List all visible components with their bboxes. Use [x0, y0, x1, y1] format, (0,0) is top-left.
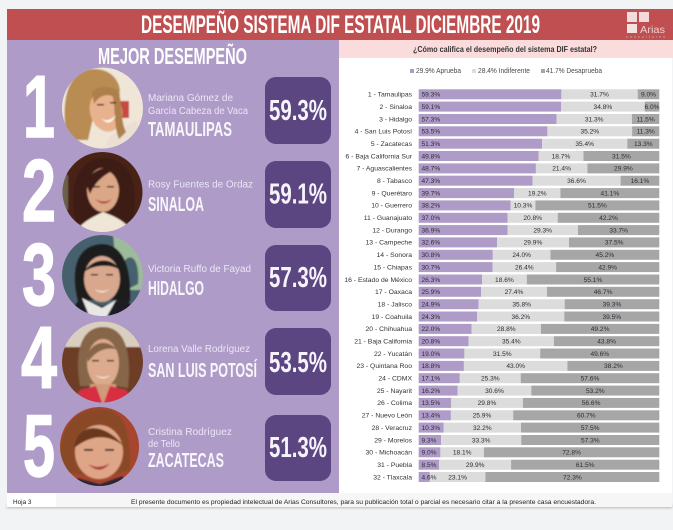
copyright notice: El presente documento es propiedad intelectual de Arias Consultores, para su publicación total o parcial es necesario citar a la presente casa encuestadora. — [131, 499, 596, 506]
name and state — [148, 427, 232, 472]
row 6 — [346, 151, 659, 161]
row 21: 21 - Baja California — [354, 339, 412, 346]
row 9: 41.1% — [601, 190, 619, 197]
row 14: 30.8% — [422, 252, 440, 259]
row 17: 46.7% — [594, 289, 613, 296]
row 23: 18.8% — [422, 363, 440, 370]
row 3: 31.3% — [585, 116, 604, 123]
name and state: Rosy Fuentes de Ordaz — [148, 180, 253, 190]
row 12: 12 - Durango — [372, 227, 412, 234]
row 17 — [375, 287, 659, 297]
row 29: 57.3% — [581, 437, 600, 444]
row 27: 27 - Nuevo León — [362, 413, 412, 420]
row 20: 49.2% — [591, 326, 610, 333]
row 21: 35.4% — [502, 339, 521, 346]
portrait 1 — [62, 68, 143, 148]
row 19 — [372, 312, 659, 322]
row 29: 33.3% — [472, 437, 491, 444]
row 2: 6.0% — [644, 104, 660, 111]
score box: 59.1% — [269, 178, 327, 210]
portrait 3 — [60, 233, 145, 318]
row 26: 13.5% — [422, 400, 440, 407]
row 13 — [366, 237, 659, 247]
logo: Arias Consultores: Arias — [640, 24, 665, 36]
row 9: 9 - Querétaro — [372, 190, 412, 197]
row 13: 37.5% — [605, 240, 624, 247]
row 5: 13.3% — [634, 141, 653, 148]
name and state: SINALOA — [148, 194, 204, 216]
score box: 53.5% — [269, 347, 327, 379]
row 10: 10.3% — [514, 203, 532, 210]
legend: 29.9% Aprueba — [416, 66, 462, 75]
row 24: 25.3% — [481, 376, 500, 383]
row 18: 39.3% — [603, 302, 621, 309]
row 9: 39.7% — [422, 190, 440, 197]
row 16: 55.1% — [584, 277, 602, 284]
row 1 — [368, 89, 659, 99]
name and state: Cristina Rodríguez — [148, 427, 232, 438]
row 8: 8 - Tabasco — [377, 178, 412, 185]
row 19: 39.5% — [602, 314, 621, 321]
row 5 — [371, 139, 659, 149]
row 24: 57.6% — [581, 376, 599, 383]
rank number 4: 4 — [21, 308, 57, 407]
row 3 — [379, 114, 659, 124]
row 4: 35.2% — [580, 129, 599, 136]
row 13: 32.6% — [422, 240, 440, 247]
score box: 59.3% — [269, 95, 327, 127]
row 30: 30 - Michoacán — [366, 450, 412, 457]
row 24 — [378, 373, 659, 383]
score box — [265, 77, 331, 144]
row 6: 18.7% — [552, 153, 570, 160]
heading: mejor desempeño: MEJOR DESEMPEÑO — [98, 42, 247, 69]
row 26: 29.8% — [478, 400, 496, 407]
name and state: ZACATECAS — [148, 450, 224, 472]
question heading — [339, 40, 673, 58]
row 21: 20.8% — [422, 339, 440, 346]
row 27: 25.9% — [473, 413, 491, 420]
row 20 — [366, 324, 659, 334]
row 5: 51.3% — [422, 141, 440, 148]
row 18: 18 - Jalisco — [378, 302, 412, 309]
score box — [265, 328, 331, 395]
name and state — [148, 180, 253, 216]
row 1: 31.7% — [590, 92, 609, 99]
row 8: 36.6% — [567, 178, 586, 185]
question heading: ¿Cómo califica el desempeño del sistema DIF estatal? — [413, 45, 597, 54]
row 8: 16.1% — [631, 178, 649, 185]
row 32: 23.1% — [448, 474, 467, 481]
row 28 — [372, 423, 659, 433]
row 3: 11.5% — [636, 116, 655, 123]
row 15: 26.4% — [515, 264, 534, 271]
row 15 — [373, 262, 659, 272]
row 30 — [366, 447, 659, 457]
row 31: 8.5% — [422, 462, 437, 469]
row 20: 28.8% — [497, 326, 516, 333]
row 11: 42.2% — [599, 215, 618, 222]
name and state: SAN LUIS POTOSÍ — [148, 359, 257, 382]
row 16: 26.3% — [422, 277, 440, 284]
row 26 — [377, 398, 659, 408]
row 6: 49.8% — [422, 153, 440, 160]
name and state: TAMAULIPAS — [148, 119, 232, 141]
row 25: 30.6% — [485, 388, 504, 395]
row 3: 3 - Hidalgo — [379, 116, 412, 123]
row 32: 4.6% — [422, 474, 437, 481]
row 29 — [374, 435, 659, 445]
row 25: 25 - Nayarit — [377, 388, 412, 395]
legend — [410, 66, 603, 75]
row 6: 31.5% — [612, 153, 631, 160]
panel: mejor desempeño — [7, 40, 339, 495]
row 16 — [344, 274, 659, 284]
row 32: 72.3% — [563, 474, 582, 481]
row 9: 19.2% — [528, 190, 547, 197]
row 4: 4 - San Luis Potosí — [355, 129, 412, 136]
page label: Hoja 3 — [13, 499, 32, 506]
rank number 1: 1 — [23, 57, 55, 156]
row 10: 51.5% — [588, 203, 607, 210]
row 31 — [377, 460, 659, 470]
row 11: 37.0% — [422, 215, 440, 222]
row 17: 25.9% — [422, 289, 440, 296]
row 25: 16.2% — [422, 388, 440, 395]
row 2: 2 - Sinaloa — [380, 104, 412, 111]
row 11: 11 - Guanajuato — [364, 215, 412, 222]
row 24: 24 - CDMX — [378, 376, 412, 383]
row 19: 36.2% — [511, 314, 530, 321]
row 12: 33.7% — [609, 227, 628, 234]
row 17: 27.4% — [505, 289, 523, 296]
row 20: 22.0% — [422, 326, 440, 333]
row 25: 53.2% — [586, 388, 605, 395]
row 9 — [372, 188, 659, 198]
row 31: 29.9% — [466, 462, 485, 469]
portrait 5 — [60, 407, 139, 486]
name and state: Lorena Valle Rodríguez — [148, 344, 250, 355]
row 10: 38.2% — [422, 203, 440, 210]
row 23 — [356, 361, 659, 371]
row 24: 17.1% — [422, 376, 440, 383]
row 31: 31 - Puebla — [377, 462, 412, 469]
row 15: 30.7% — [422, 264, 440, 271]
rank 5: Zacatecas — [24, 407, 331, 486]
row 4 — [355, 126, 659, 136]
row 27: 13.4% — [422, 413, 440, 420]
name and state — [148, 344, 257, 382]
row 20: 20 - Chihuahua — [366, 326, 412, 333]
row 28: 28 - Veracruz — [372, 425, 413, 432]
row 2: 34.8% — [594, 104, 612, 111]
row 15: 42.9% — [598, 264, 617, 271]
row 1: 1 - Tamaulipas — [368, 92, 413, 99]
row 22: 49.6% — [590, 351, 609, 358]
row 30: 72.8% — [562, 450, 581, 457]
page label — [7, 493, 56, 507]
row 7: 29.9% — [614, 166, 633, 173]
row 27 — [362, 410, 659, 420]
row 14 — [376, 250, 659, 260]
row 27: 60.7% — [577, 413, 596, 420]
row 18 — [378, 299, 659, 309]
rank number 5: 5 — [23, 396, 55, 495]
name and state — [148, 93, 249, 141]
rank 2: Sinaloa — [24, 152, 331, 232]
logo: Arias Consultores: consultores — [626, 35, 665, 39]
row 19: 19 - Coahuila — [372, 314, 412, 321]
row 12: 29.3% — [533, 227, 552, 234]
row 3: 57.3% — [422, 116, 440, 123]
row 28: 32.2% — [473, 425, 492, 432]
row 8 — [377, 176, 659, 186]
row 25 — [377, 386, 659, 396]
rank 3: Hidalgo — [22, 235, 331, 316]
row 31: 61.5% — [576, 462, 595, 469]
rank 1: Tamaulipas — [26, 68, 331, 148]
row 23: 23 - Quintana Roo — [356, 363, 412, 370]
row 7: 48.7% — [422, 166, 440, 173]
rank number 3: 3 — [22, 225, 56, 324]
row 26: 56.6% — [582, 400, 601, 407]
name and state: de Tello — [148, 439, 181, 450]
row 2 — [380, 102, 660, 112]
footer — [7, 493, 672, 507]
row 21: 43.8% — [597, 339, 616, 346]
legend: 41.7% Desaprueba — [546, 66, 603, 75]
row 2: 59.1% — [422, 104, 440, 111]
row 5: 5 - Zacatecas — [371, 141, 413, 148]
row 14: 14 - Sonora — [376, 252, 412, 259]
row 11: 20.8% — [523, 215, 542, 222]
row 30: 9.0% — [422, 450, 437, 457]
row 13: 13 - Campeche — [366, 240, 412, 247]
score box: 51.3% — [269, 432, 327, 464]
row 32 — [373, 472, 659, 482]
row 26: 26 - Colima — [377, 400, 412, 407]
row 29: 29 - Morelos — [374, 437, 413, 444]
row 18: 24.9% — [422, 302, 440, 309]
row 28: 10.3% — [422, 425, 440, 432]
row 10 — [371, 200, 659, 210]
row 8: 47.3% — [422, 178, 440, 185]
row 6: 6 - Baja California Sur — [346, 153, 413, 160]
row 23: 38.2% — [604, 363, 623, 370]
row 12: 36.9% — [422, 227, 440, 234]
row 7 — [356, 163, 659, 173]
row 10: 10 - Guerrero — [371, 203, 412, 210]
row 7: 21.4% — [552, 166, 571, 173]
score box — [265, 245, 331, 311]
row 22: 19.0% — [422, 351, 440, 358]
rank 4: San Luis Potosí — [21, 322, 331, 402]
row 21 — [354, 336, 659, 346]
row 14: 45.2% — [596, 252, 614, 259]
row 29: 9.3% — [422, 437, 437, 444]
row 32: 32 - Tlaxcala — [373, 474, 412, 481]
score box — [265, 415, 331, 481]
rank number 2: 2 — [22, 141, 56, 240]
row 12 — [372, 225, 659, 235]
row 30: 18.1% — [453, 450, 472, 457]
score box — [265, 161, 331, 228]
portrait 4 — [60, 320, 145, 405]
row 7: 7 - Aguascalientes — [356, 166, 413, 173]
row 4: 53.5% — [422, 129, 440, 136]
name and state: Victoria Ruffo de Fayad — [148, 264, 251, 275]
row 15: 15 - Chiapas — [373, 264, 413, 271]
row 17: 17 - Oaxaca — [375, 289, 412, 296]
row 18: 35.8% — [512, 302, 531, 309]
panel: chart — [339, 40, 673, 493]
stacked bar chart — [344, 89, 660, 482]
portrait 2 — [62, 152, 142, 232]
score box: 57.3% — [269, 262, 327, 294]
row 22 — [374, 348, 659, 358]
row 1: 9.0% — [641, 92, 656, 99]
row 14: 24.0% — [512, 252, 531, 259]
row 22: 22 - Yucatán — [374, 351, 412, 358]
name and state — [148, 264, 251, 300]
row 19: 24.3% — [422, 314, 440, 321]
row 1: 59.3% — [422, 92, 440, 99]
row 5: 35.4% — [575, 141, 594, 148]
row 28: 57.5% — [581, 425, 600, 432]
name and state: HIDALGO — [148, 278, 204, 300]
row 22: 31.5% — [493, 351, 512, 358]
row 16: 16 - Estado de México — [344, 277, 412, 284]
row 23: 43.0% — [506, 363, 525, 370]
row 16: 18.6% — [495, 277, 514, 284]
row 11 — [364, 213, 659, 223]
logo: Arias Consultores — [626, 12, 665, 39]
name and state: García Cabeza de Vaca — [148, 106, 249, 117]
footer shadow — [7, 505, 672, 508]
row 4: 11.3% — [637, 129, 655, 136]
header banner — [7, 9, 673, 40]
row 13: 29.9% — [524, 240, 542, 247]
legend: 28.4% Indiferente — [478, 66, 530, 75]
name and state: Mariana Gómez de — [148, 93, 234, 104]
